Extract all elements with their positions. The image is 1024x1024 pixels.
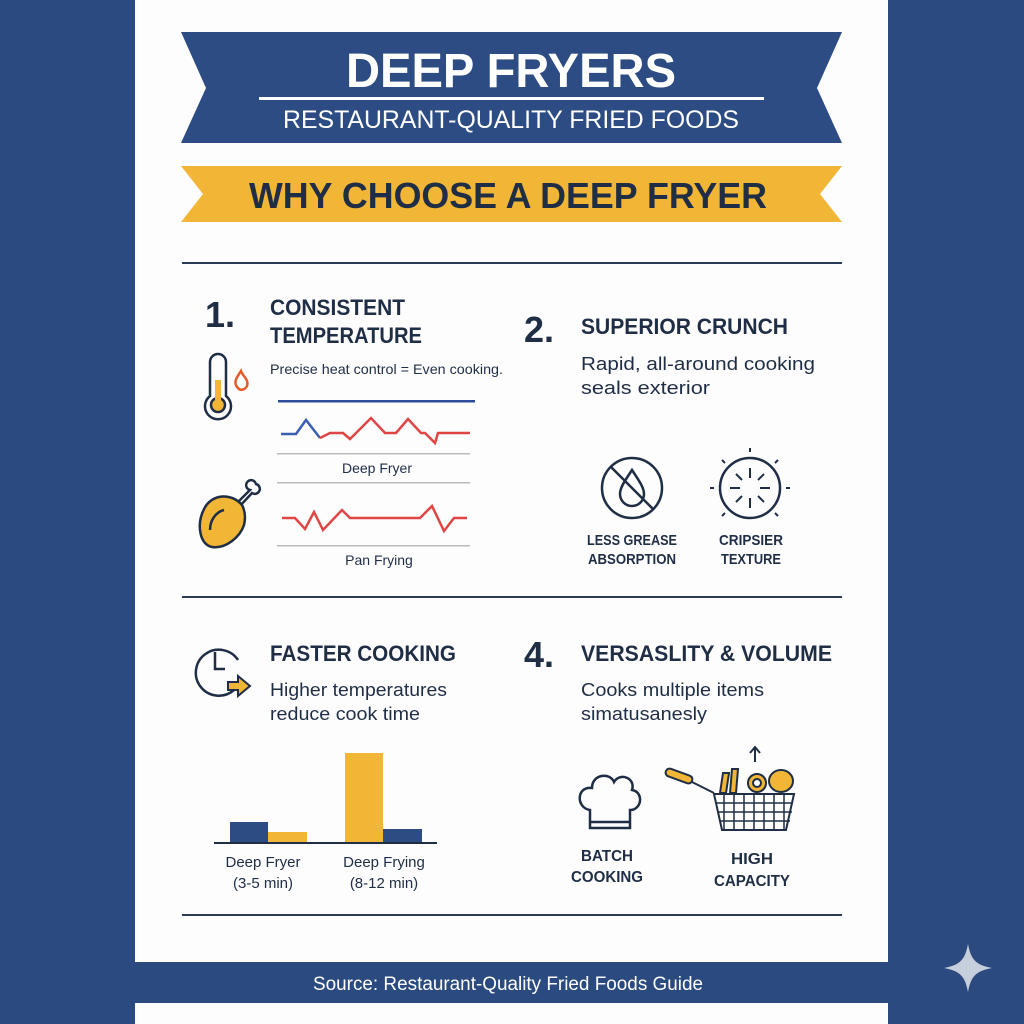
- panel 4: versatility: HIGH: [731, 851, 773, 868]
- panel 4: versatility: VERSASLITY & VOLUME: [581, 641, 832, 666]
- panel 3: faster cooking: Higher temperatures: [270, 680, 447, 700]
- panel 4: versatility: simatusanesly: [581, 704, 707, 724]
- icon: sparkle: [944, 944, 992, 992]
- panel 2: superior crunch: seals exterior: [581, 378, 710, 398]
- title banner: RESTAURANT-QUALITY FRIED FOODS: [283, 106, 739, 134]
- panel 4: versatility: Cooks multiple items: [581, 680, 764, 700]
- footer source: Source: Restaurant-Quality Fried Foods Guide: [313, 974, 703, 995]
- icon: chicken leg: [200, 480, 260, 547]
- panel 1: consistent temperature: Pan Frying: [345, 552, 413, 568]
- bar chart: Deep Frying: [343, 854, 425, 871]
- icon: crispier burst: [710, 448, 790, 518]
- bar chart: (8-12 min): [350, 875, 418, 892]
- icon: thermometer: [205, 354, 247, 419]
- panel 4: versatility: BATCH: [581, 848, 633, 865]
- panel 2: superior crunch: 2.: [524, 309, 554, 350]
- panel 4: versatility: COOKING: [571, 869, 643, 886]
- bar chart: [214, 753, 437, 892]
- panel 2: superior crunch: TEXTURE: [721, 551, 781, 568]
- panel 2: superior crunch: Rapid, all-around cooking: [581, 354, 815, 374]
- panel 4: versatility: [524, 634, 832, 890]
- panel 1: consistent temperature: TEMPERATURE: [270, 323, 422, 348]
- subtitle banner: [181, 166, 842, 222]
- panel 1: consistent temperature: Deep Fryer: [342, 460, 412, 476]
- panel 3: faster cooking: [196, 641, 456, 892]
- panel 3: faster cooking: FASTER COOKING: [270, 641, 456, 666]
- title banner: DEEP FRYERS: [346, 45, 676, 98]
- panel 1: consistent temperature: Precise heat control = Even cooking.: [270, 361, 503, 377]
- panel 2: superior crunch: LESS GREASE: [587, 532, 677, 549]
- panel 4: versatility: 4.: [524, 634, 554, 675]
- subtitle banner: WHY CHOOSE A DEEP FRYER: [249, 175, 767, 216]
- panel 2: superior crunch: [524, 309, 815, 568]
- panel 2: superior crunch: SUPERIOR CRUNCH: [581, 314, 788, 339]
- icon: no grease: [602, 458, 662, 518]
- title banner: [181, 32, 842, 143]
- panel 1: consistent temperature: [200, 294, 503, 568]
- panel 2: superior crunch: ABSORPTION: [588, 551, 676, 568]
- panel 1: consistent temperature: CONSISTENT: [270, 295, 406, 320]
- panel 4: versatility: CAPACITY: [714, 873, 790, 890]
- bar chart: Deep Fryer: [225, 854, 301, 871]
- icon: chef hat: [580, 776, 640, 828]
- bar chart: (3-5 min): [233, 875, 293, 892]
- icon: fry basket: [664, 747, 794, 830]
- panel 1: consistent temperature: 1.: [205, 294, 235, 335]
- panel 2: superior crunch: CRIPSIER: [719, 532, 783, 549]
- icon: clock: [196, 650, 250, 696]
- panel 3: faster cooking: reduce cook time: [270, 704, 420, 724]
